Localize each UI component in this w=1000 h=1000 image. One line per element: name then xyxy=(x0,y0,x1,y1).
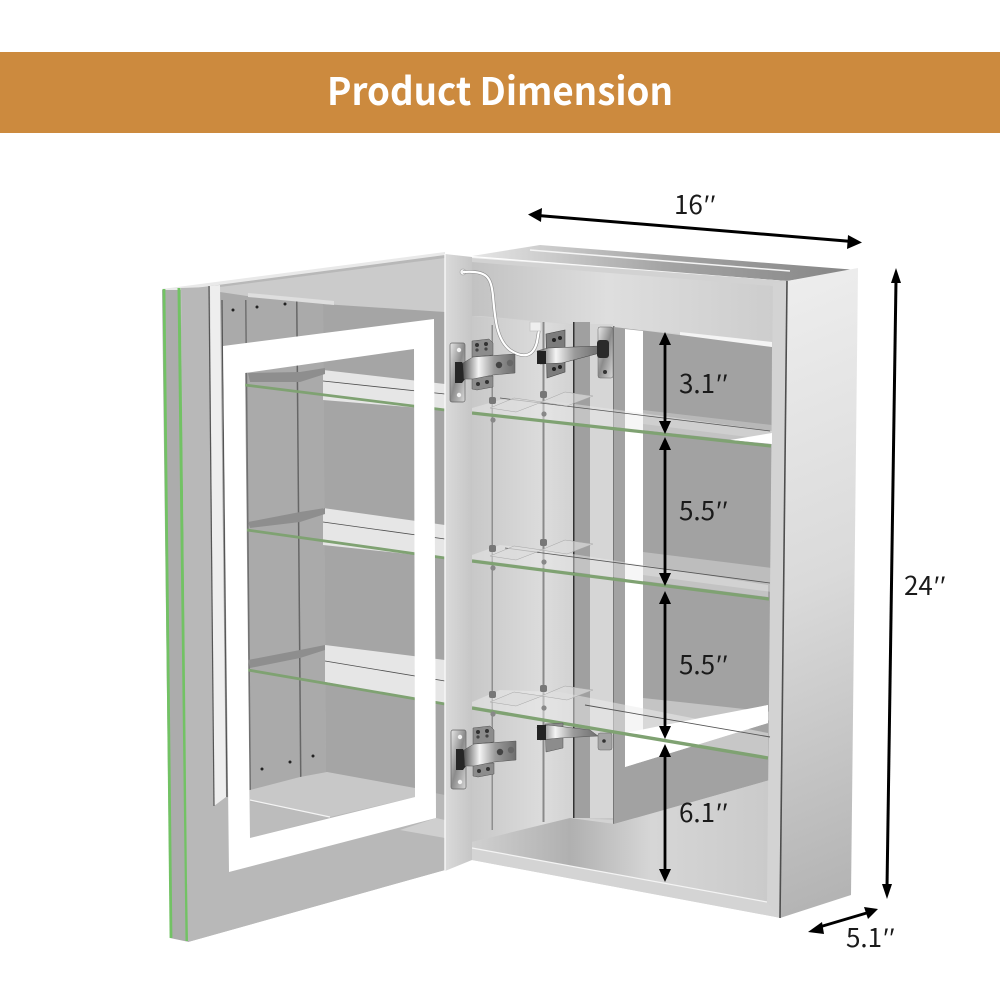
reflected cabinet floor xyxy=(250,772,415,817)
arrow: 3.1 xyxy=(659,332,671,434)
cabinet body xyxy=(472,245,858,918)
mirror light reflection xyxy=(625,329,768,767)
label: 5.1 inches: 5.1′′ xyxy=(846,918,894,955)
label: 5.5 inches upper: 5.5′′ xyxy=(679,491,727,528)
cabinet floor xyxy=(472,780,770,902)
door hinge jamb xyxy=(445,254,472,871)
hinge: bottom cabinet xyxy=(537,723,612,752)
interior ceiling xyxy=(472,262,773,347)
mirror ceiling xyxy=(220,258,445,312)
cabinet top surface xyxy=(472,245,857,281)
hinge: bottom door xyxy=(451,726,516,789)
top reflected bar xyxy=(248,293,334,305)
title: Product Dimension xyxy=(327,61,673,116)
reflected shelf 3 xyxy=(248,645,445,704)
arrow: 6.1 xyxy=(659,744,671,882)
door edge xyxy=(162,288,189,942)
label: 3.1 inches: 3.1′′ xyxy=(679,364,727,401)
LED light frame xyxy=(223,319,436,872)
door right edge xyxy=(444,254,446,871)
right shelves xyxy=(472,391,772,767)
mirror back wall right xyxy=(323,304,445,795)
label: 5.5 inches lower: 5.5′′ xyxy=(679,645,727,682)
back mirror reflection xyxy=(614,327,772,824)
arrow: 5.5 upper xyxy=(659,437,671,586)
right inner frame xyxy=(767,281,787,918)
reflected white vertical strip xyxy=(210,285,226,806)
reflected shelf 2 xyxy=(247,508,445,558)
reflected shelf bands xyxy=(643,410,772,440)
label: 24 inches: 24′′ xyxy=(904,566,945,603)
shelf 2 xyxy=(472,539,770,599)
shelf 3 xyxy=(472,685,770,767)
reflected shelf 1 xyxy=(245,368,445,410)
label: 16 inches: 16′′ xyxy=(674,185,715,222)
label: 6.1 inches: 6.1′′ xyxy=(679,793,727,830)
hinge: top cabinet xyxy=(537,327,613,378)
door top edge highlight xyxy=(162,252,445,290)
arrow: 5.5 lower xyxy=(659,591,671,739)
mirror screw holes xyxy=(232,302,314,770)
LED wire xyxy=(460,269,541,355)
arrow: depth xyxy=(808,907,878,934)
dimension arrows xyxy=(528,208,901,934)
hinge: top door xyxy=(450,339,515,402)
cabinet side panel xyxy=(780,268,858,918)
arrow: width xyxy=(528,208,862,249)
shelf 1 xyxy=(472,391,772,446)
arrow: height xyxy=(882,268,901,899)
door face xyxy=(180,254,445,942)
dark back column xyxy=(573,322,590,818)
lower left face panel xyxy=(181,287,229,884)
lower door glass xyxy=(187,815,445,942)
cabinet interior xyxy=(472,258,787,918)
open door xyxy=(162,252,445,942)
mirror back wall left xyxy=(220,292,326,800)
column lines xyxy=(296,300,302,778)
title banner xyxy=(0,52,1000,133)
back wall xyxy=(472,316,615,842)
green glass edge lines xyxy=(164,289,171,938)
